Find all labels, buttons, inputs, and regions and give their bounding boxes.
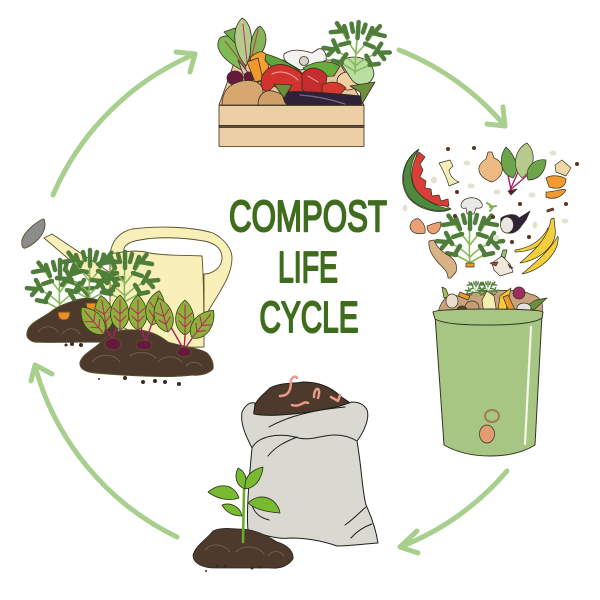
seedling mound bbox=[193, 528, 293, 568]
can body bbox=[110, 251, 204, 348]
arrow: sack to garden bbox=[31, 365, 177, 537]
bin rim bbox=[433, 309, 543, 325]
chard leaves bbox=[218, 18, 266, 75]
carrot tops bbox=[321, 20, 393, 76]
seeds and crumbs bbox=[402, 150, 568, 242]
eggshells bbox=[410, 219, 425, 234]
title bbox=[229, 192, 387, 342]
illustration: watering can and vegetable garden bbox=[22, 219, 232, 386]
front soil mound bbox=[80, 330, 213, 376]
cucumbers bbox=[265, 54, 303, 76]
arrow: harvest to scraps bbox=[399, 50, 505, 126]
arrow: bin to sack bbox=[400, 471, 507, 553]
can handle bbox=[110, 227, 232, 318]
carrots bbox=[58, 303, 97, 320]
front mound bumps bbox=[92, 352, 202, 366]
title: LIFE bbox=[278, 243, 338, 292]
illustration: compost sack bbox=[242, 377, 378, 546]
arrow: garden to harvest bbox=[53, 52, 195, 195]
mound bumps bbox=[205, 545, 284, 556]
illustration: seedling in soil bbox=[193, 467, 293, 572]
illustration: falling food scraps bbox=[402, 143, 579, 278]
food heap bbox=[438, 281, 547, 314]
chard stalk fragment bbox=[547, 208, 554, 212]
bin tag bbox=[480, 425, 494, 443]
seedling stem bbox=[243, 490, 244, 542]
bin highlight bbox=[525, 327, 531, 444]
eggplant slice bbox=[501, 211, 530, 233]
potato peel bbox=[429, 240, 457, 278]
potatoes bbox=[222, 81, 263, 105]
chard bbox=[501, 143, 546, 195]
herb sprig bbox=[487, 203, 496, 211]
back mound bumps bbox=[38, 327, 80, 334]
title: COMPOST bbox=[229, 192, 387, 241]
mushrooms bbox=[284, 49, 326, 70]
title: CYCLE bbox=[260, 293, 358, 342]
can spout bbox=[44, 234, 118, 296]
carrot tops bbox=[26, 260, 94, 312]
back soil mound bbox=[27, 298, 120, 342]
banana peel bbox=[515, 218, 558, 274]
soil and worms bbox=[253, 377, 352, 418]
crate front slats bbox=[219, 106, 364, 126]
illustration: compost bin bbox=[433, 281, 547, 456]
sack fold bbox=[252, 435, 357, 448]
can rose bbox=[22, 219, 45, 248]
eggplant bbox=[283, 91, 362, 105]
carrots bbox=[250, 52, 270, 82]
scrap pieces bbox=[492, 256, 513, 276]
illustration: vegetable crate bbox=[218, 18, 393, 146]
sack bbox=[242, 402, 378, 546]
beet bbox=[227, 71, 243, 85]
onion bbox=[479, 152, 502, 182]
bin tag ring bbox=[485, 410, 499, 422]
orange peel bbox=[546, 160, 571, 198]
beet stems bbox=[100, 312, 202, 350]
apple core bbox=[439, 160, 459, 186]
beet leaves bbox=[92, 294, 116, 332]
soil crumbs bbox=[205, 564, 262, 572]
bin body bbox=[435, 315, 542, 456]
soil crumbs bbox=[64, 342, 181, 386]
mushroom bbox=[461, 198, 482, 214]
seedling leaves bbox=[208, 467, 280, 516]
peppers bbox=[261, 64, 304, 93]
watermelon rind bbox=[403, 149, 451, 212]
carrot top bbox=[436, 213, 504, 265]
beets bbox=[105, 338, 121, 350]
crate back bbox=[219, 60, 364, 105]
onion and cabbage bbox=[337, 72, 359, 90]
